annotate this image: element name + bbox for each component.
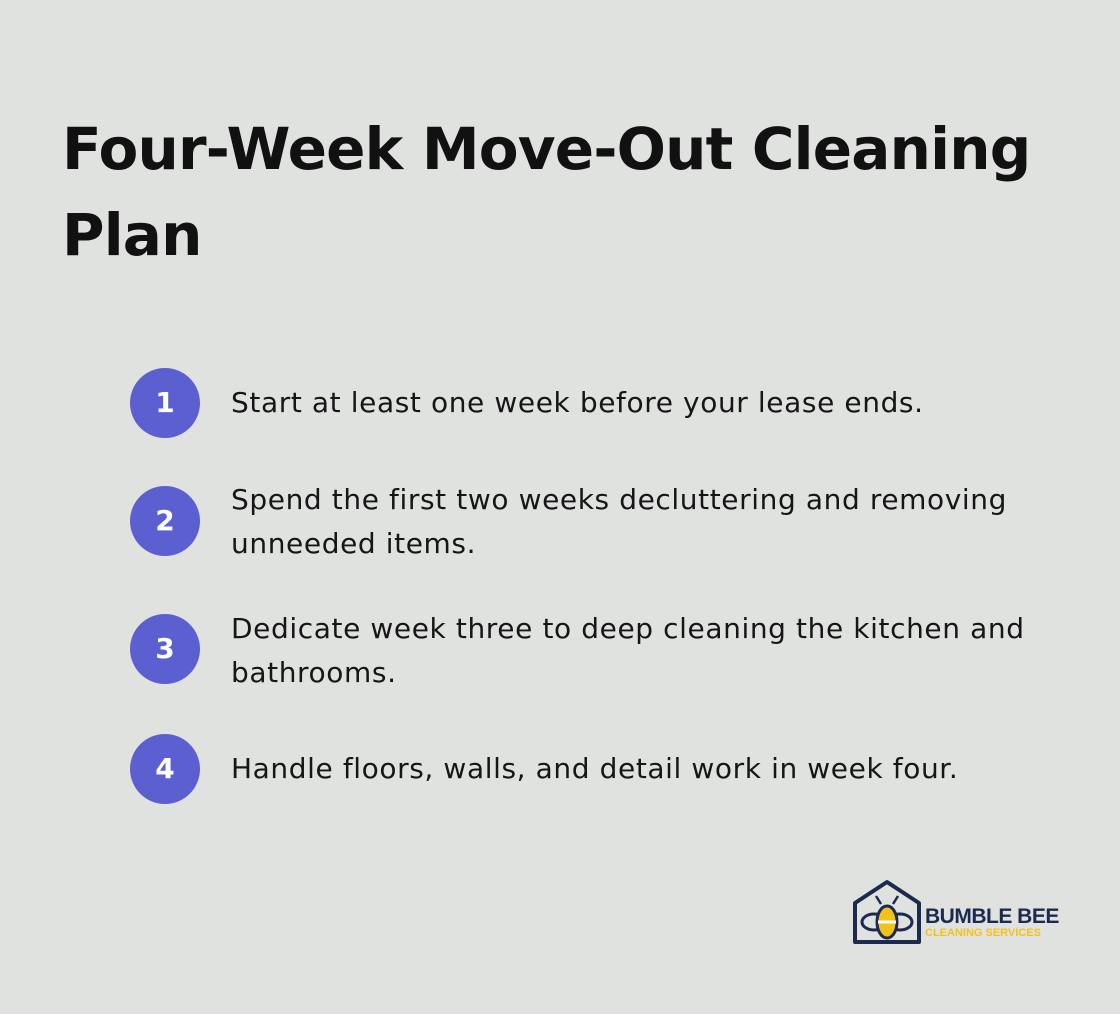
step 4: 4 (155, 752, 175, 785)
step 2: Spend the first two weeks decluttering and removing (231, 483, 1007, 516)
step 4: Handle floors, walls, and detail work in week four. (231, 752, 958, 785)
brand text: BUMBLE BEE (925, 905, 1059, 928)
step 4 (130, 734, 958, 804)
step 3 (130, 612, 1025, 689)
step 2: unneeded items. (231, 527, 476, 560)
step 1: 1 (155, 386, 175, 419)
step 1 (130, 368, 924, 438)
step 2 (130, 483, 1007, 560)
logo: CLEANING SERVICES (925, 927, 1041, 939)
step 3: 3 (155, 632, 175, 665)
icon: bee house (853, 880, 921, 944)
step 2: 2 (155, 504, 175, 537)
step 3: Dedicate week three to deep cleaning the kitchen and (231, 612, 1025, 645)
step 1: Start at least one week before your lease ends. (231, 386, 924, 419)
logo (853, 880, 1059, 944)
title: Four-Week Move-Out Cleaning Plan (62, 115, 1030, 269)
step 3: bathrooms. (231, 656, 397, 689)
